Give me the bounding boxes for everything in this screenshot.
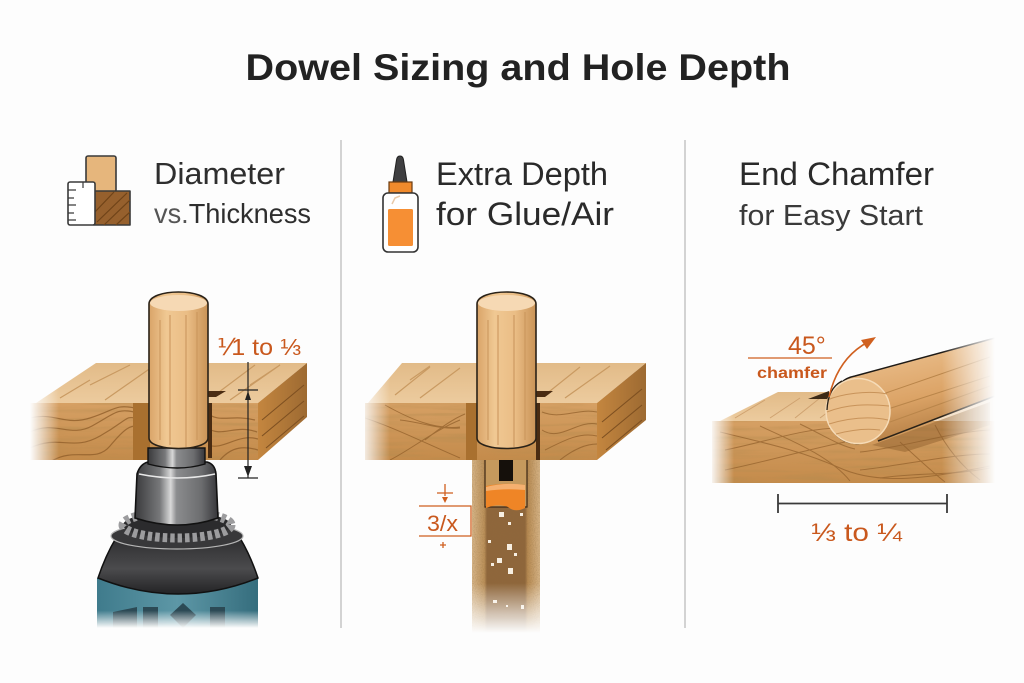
panel: diameter vs thickness [30, 156, 311, 628]
heading: diameter vs thickness: vs.Thickness [154, 198, 311, 229]
dimension: thickness arrow [238, 362, 258, 478]
drill chuck and body [97, 448, 258, 628]
illustration: board [712, 338, 995, 483]
illustration: board with hole [365, 363, 646, 460]
glue plug [486, 484, 525, 510]
heading: diameter vs thickness: Diameter [154, 156, 285, 191]
panel: end chamfer [712, 156, 995, 547]
dimension: fraction label: ⅟1 to ⅓ [217, 334, 301, 360]
dowel [149, 292, 208, 448]
arrow: chamfer angle [829, 337, 876, 397]
icon: glue bottle [383, 156, 418, 252]
chamfer shadow notch [808, 391, 829, 399]
shadow under dowel [872, 402, 990, 452]
title: Dowel Sizing and Hole Depth [246, 47, 790, 88]
panel: extra depth [365, 156, 646, 633]
label: 45 degree chamfer: chamfer [757, 365, 827, 382]
sand channel [472, 445, 540, 633]
dimension: width bar [778, 494, 947, 513]
heading: extra depth: for Glue/Air [436, 196, 614, 232]
dimension: depth bracket [419, 484, 471, 548]
icon: wood blocks and ruler [68, 156, 130, 225]
dowel cylinder [840, 338, 995, 441]
dimension: label: 3/x [427, 511, 458, 536]
hole walls [466, 403, 477, 460]
illustration: board with hole [30, 363, 307, 462]
heading: end chamfer [739, 156, 934, 232]
heading: diameter vs thickness [154, 156, 311, 229]
label: 45 degree chamfer [748, 332, 832, 382]
heading: end chamfer: for Easy Start [739, 200, 923, 232]
dowel end [826, 378, 890, 445]
dimension: label: ⅓ to ¼ [811, 519, 903, 547]
heading: end chamfer: End Chamfer [739, 156, 934, 192]
air gap slot [499, 460, 513, 481]
hole walls [133, 403, 150, 460]
heading: extra depth: Extra Depth [436, 156, 608, 192]
dowel [477, 292, 536, 448]
label: 45 degree chamfer: 45° [788, 332, 826, 360]
heading: extra depth [436, 156, 614, 232]
